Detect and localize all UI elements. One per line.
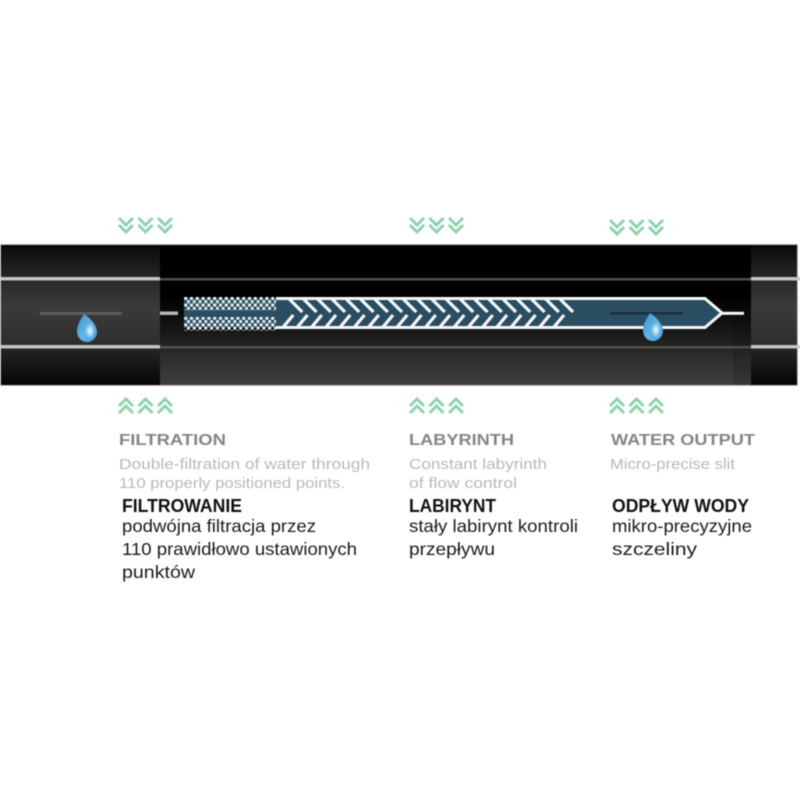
- pipe cross-section band: [0, 244, 800, 386]
- icon: labyrinth down arrows: [410, 218, 463, 232]
- filter dots: [184, 297, 276, 330]
- icon: right water drop: [643, 313, 663, 341]
- description: polish labyrinth: przepływu: [409, 539, 495, 559]
- heading: LABIRYNT: LABIRYNT: [409, 496, 496, 516]
- icon: filtration down arrows: [119, 218, 172, 232]
- description: polish filtration: 110 prawidłowo ustawionych: [122, 539, 357, 559]
- outlet dark line: [610, 312, 683, 314]
- pipe left wall lines: [0, 277, 160, 348]
- description: polish labyrinth: stały labirynt kontroli: [409, 516, 578, 536]
- outlet slit: [722, 312, 744, 315]
- heading: FILTRATION: FILTRATION: [119, 432, 226, 449]
- icon: output down arrows: [610, 220, 663, 234]
- heading: FILTROWANIE: FILTROWANIE: [122, 496, 242, 516]
- heading: ODPŁYW WODY: ODPŁYW WODY: [612, 496, 749, 516]
- left inlet thin line: [40, 312, 122, 315]
- text block: filtration: [119, 432, 370, 582]
- pipe middle wall lines: [160, 278, 751, 348]
- description: english water output: Micro-precise slit: [610, 456, 736, 473]
- description: english filtration: Double-filtration of water through: [119, 456, 370, 473]
- description: english filtration: 110 properly positioned points.: [119, 475, 345, 492]
- description: polish filtration: [122, 516, 357, 582]
- pipe middle section: [160, 245, 751, 385]
- description: polish labyrinth: [409, 516, 578, 559]
- heading: WATER OUTPUT: WATER OUTPUT: [611, 432, 755, 449]
- description: polish water output: szczeliny: [612, 539, 697, 559]
- icon: output up arrows: [610, 399, 663, 413]
- description: polish water output: mikro-precyzyjne: [612, 516, 752, 536]
- description: english labyrinth: [409, 456, 547, 492]
- labyrinth chevrons: [283, 299, 573, 327]
- connector stub: [160, 312, 178, 315]
- icon: labyrinth up arrows: [410, 399, 463, 413]
- heading: LABYRINTH: LABYRINTH: [409, 432, 514, 449]
- description: english labyrinth: Constant labyrinth: [409, 456, 547, 473]
- description: english filtration: [119, 456, 370, 492]
- description: english labyrinth: of flow control: [409, 475, 517, 492]
- description: polish filtration: podwójna filtracja przez: [122, 516, 316, 536]
- icon: left water drop: [77, 314, 97, 342]
- text block: water output: [610, 432, 755, 559]
- pipe left section: [1, 245, 160, 385]
- pipe right section: [751, 245, 797, 385]
- text block: labyrinth: [409, 432, 578, 559]
- dripper emitter: [184, 297, 744, 330]
- emitter body: [184, 298, 722, 328]
- pipe right wall lines: [751, 277, 800, 348]
- description: polish water output: [612, 516, 752, 559]
- description: polish filtration: punktów: [122, 562, 195, 582]
- icon: filtration up arrows: [119, 399, 172, 413]
- emitter outline: [276, 298, 722, 328]
